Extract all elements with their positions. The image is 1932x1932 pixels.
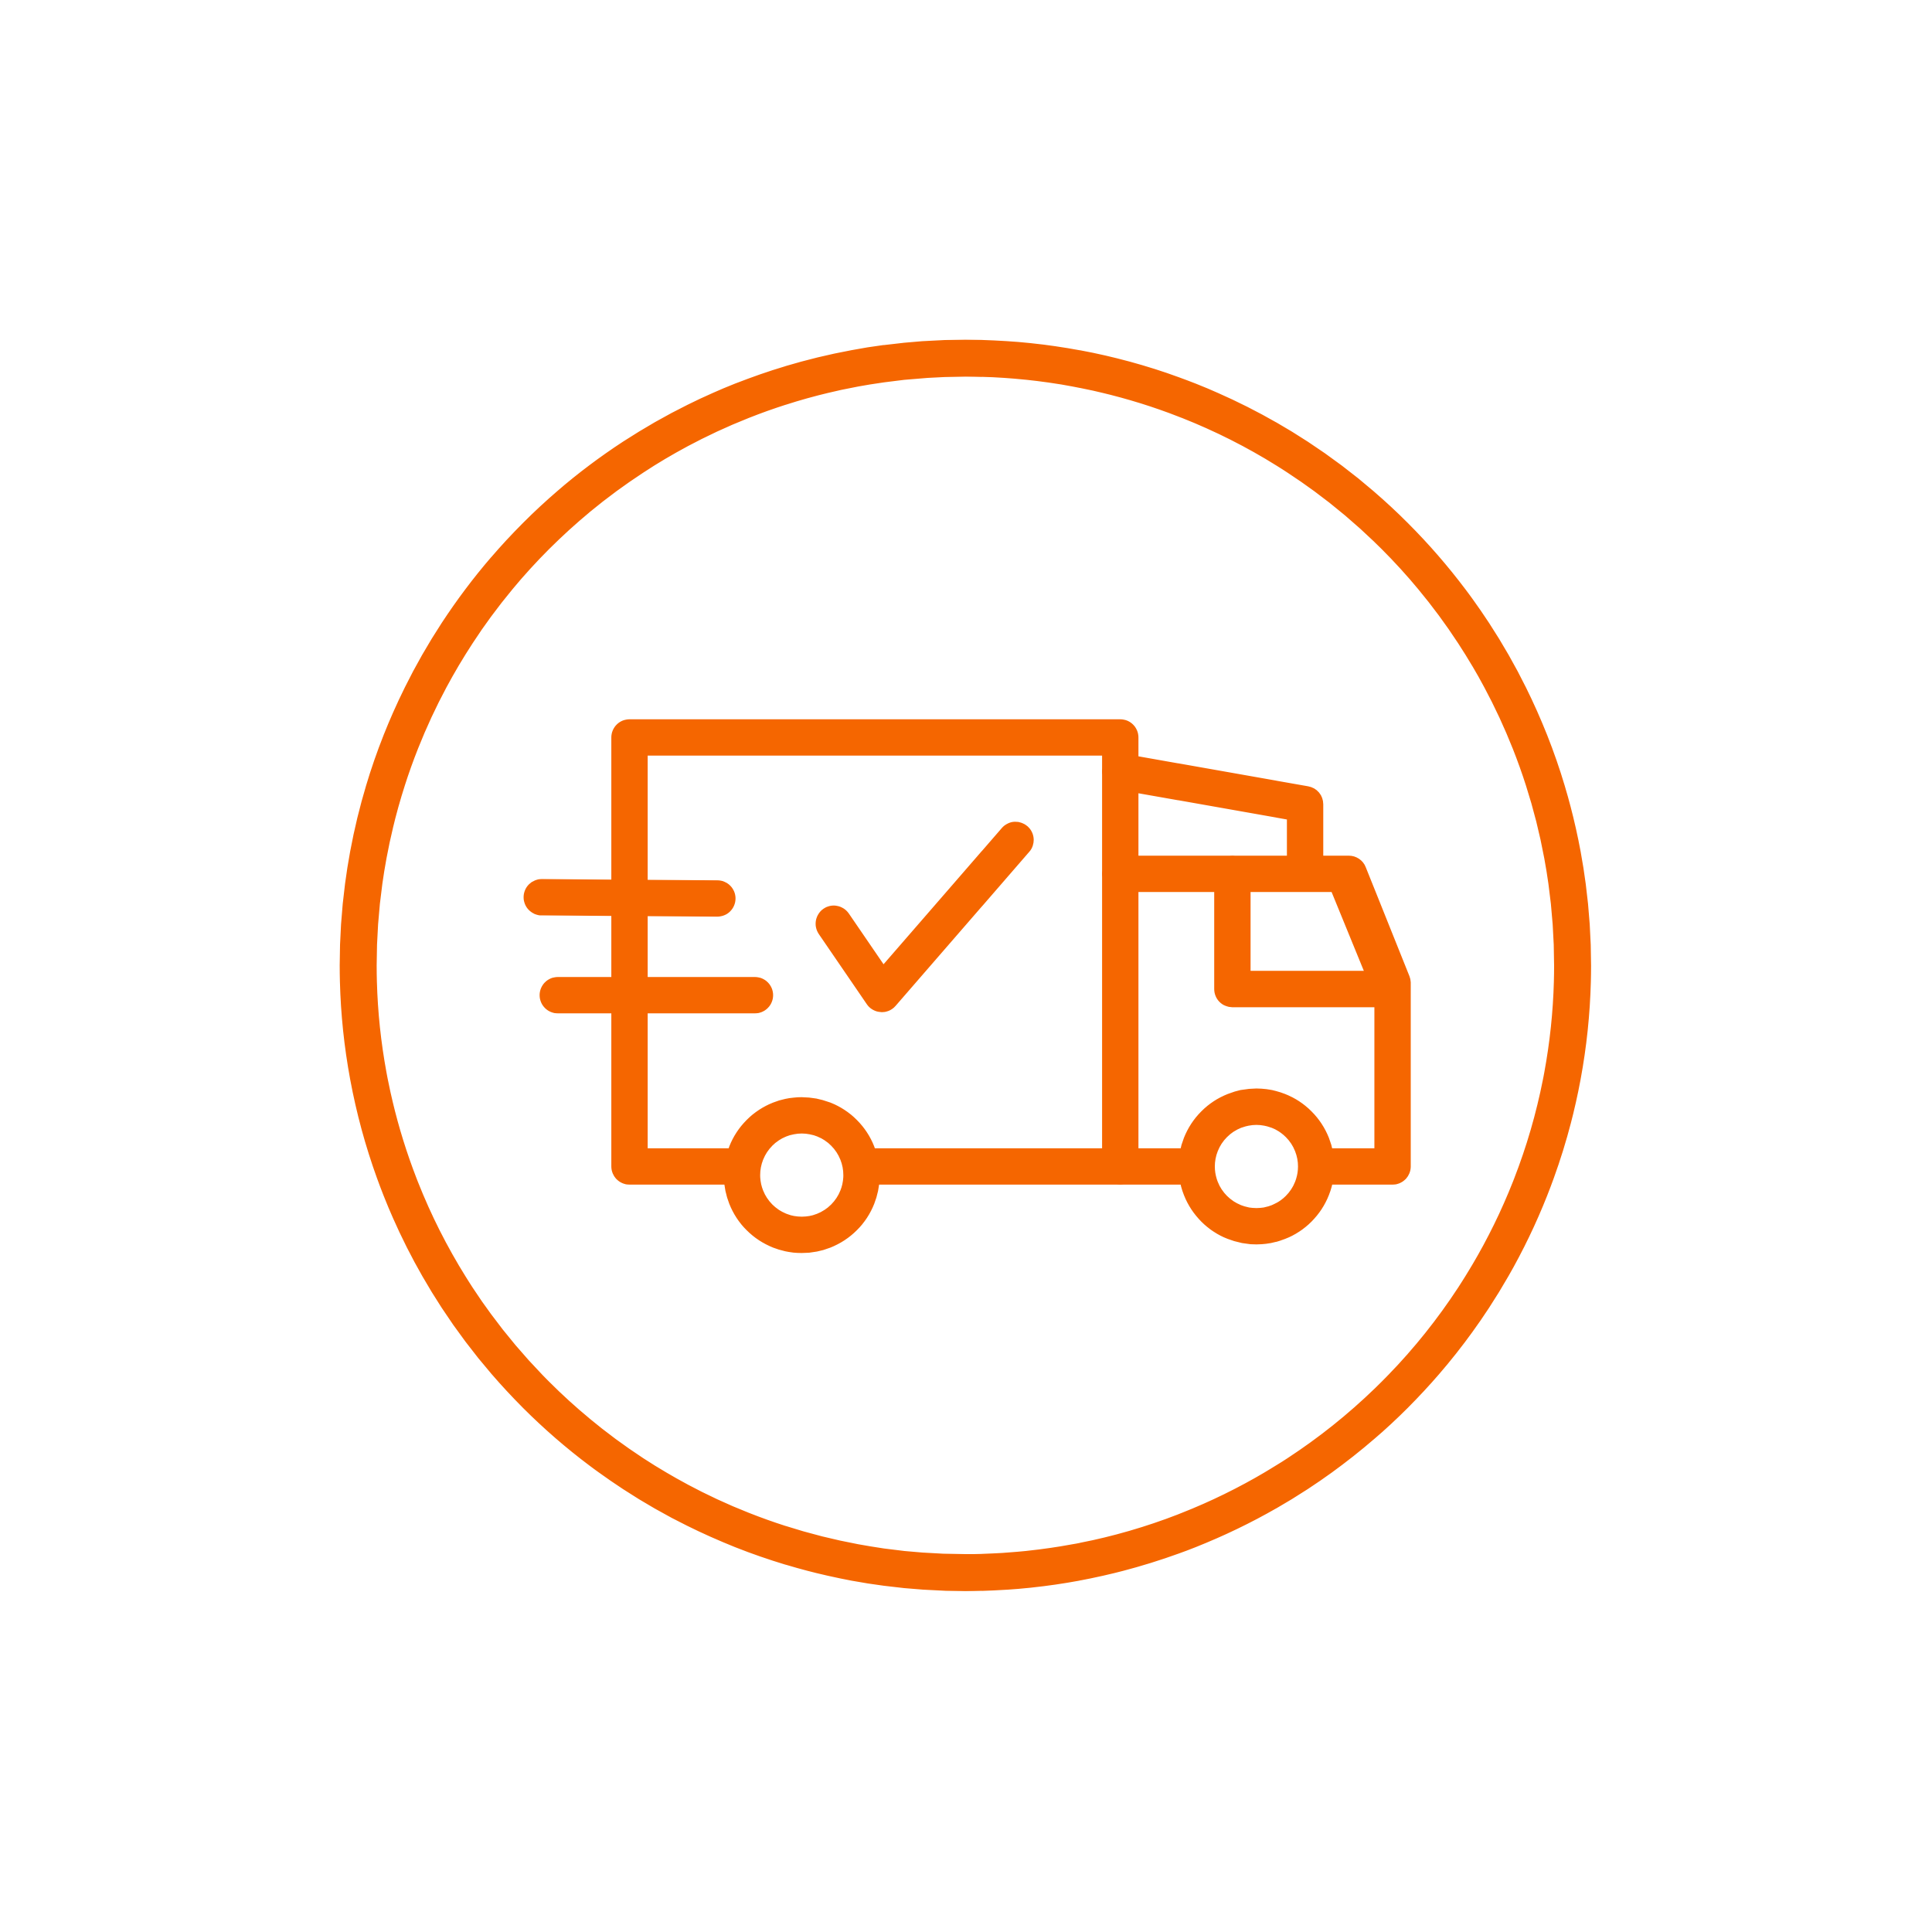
- rear wheel: [742, 1115, 862, 1235]
- truck: [542, 737, 1393, 1235]
- cab window: [1233, 874, 1393, 989]
- speed line: lower: [558, 984, 755, 1007]
- circle outline: [358, 358, 1573, 1573]
- cargo box: [630, 737, 1121, 1166]
- cab roof: [1121, 771, 1305, 873]
- windshield pillar thickening: [1331, 890, 1369, 971]
- speed line: upper: [542, 897, 717, 899]
- check mark: [834, 840, 1015, 994]
- front wheel: [1196, 1107, 1316, 1226]
- cab body: [1121, 874, 1393, 1166]
